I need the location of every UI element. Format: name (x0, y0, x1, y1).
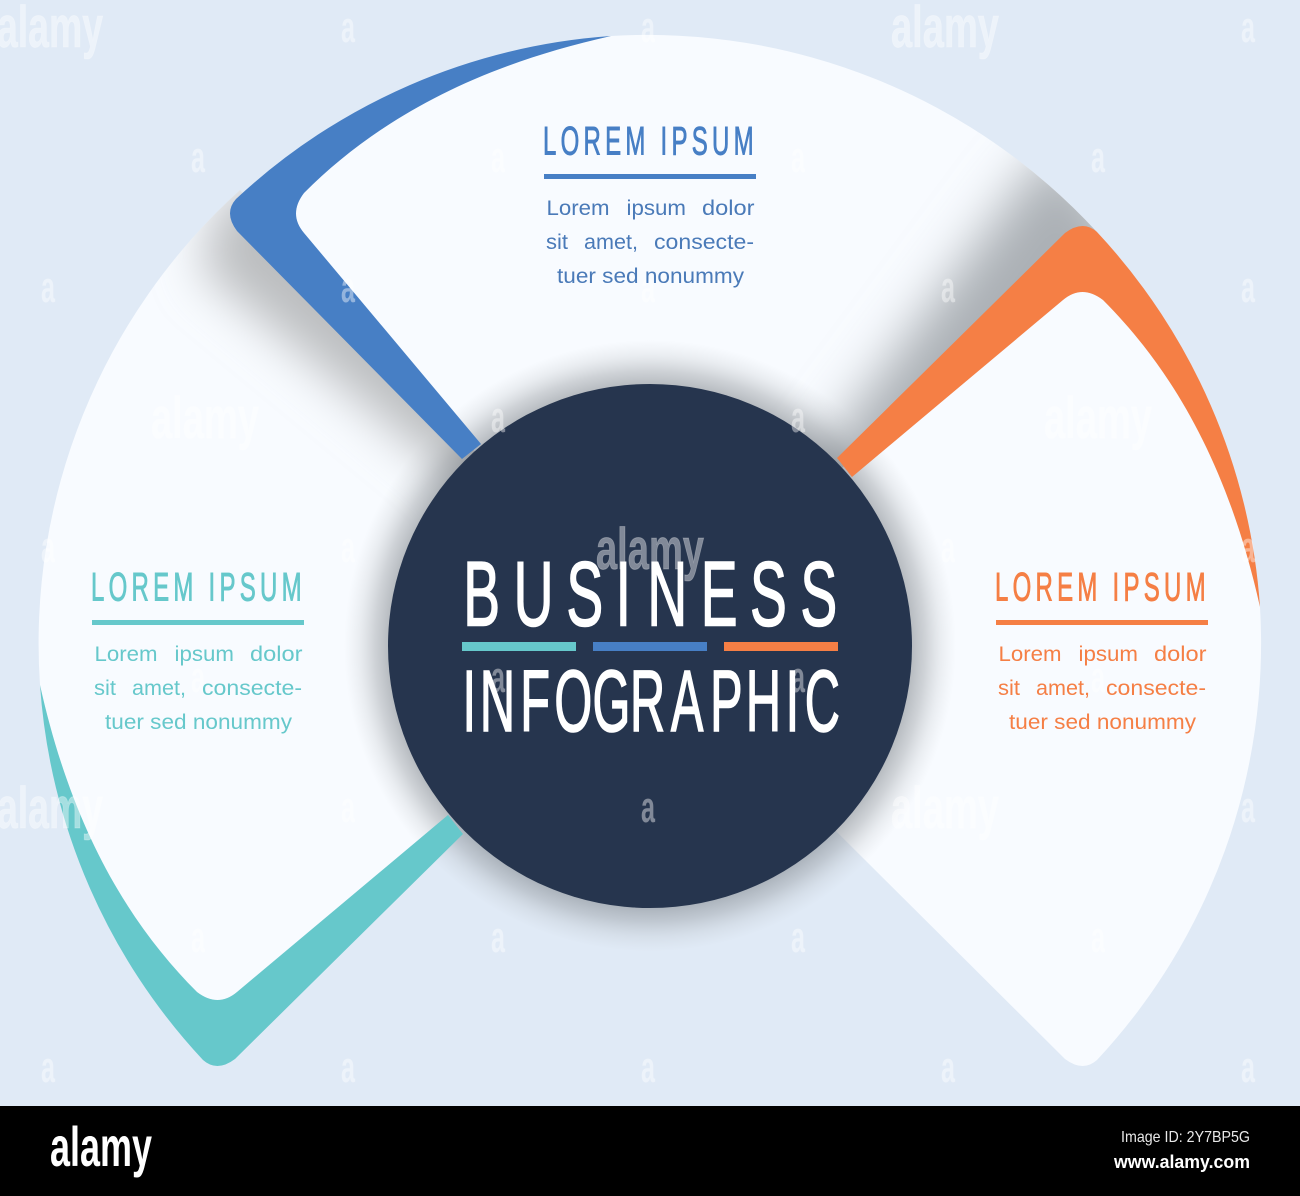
body text: Lorem (94, 643, 158, 666)
body text: sit (94, 677, 116, 700)
body text: Lorem (546, 197, 610, 220)
watermark pattern: a (1091, 653, 1105, 702)
body text: consecte- (202, 677, 302, 700)
panel: left segment (38, 190, 475, 1000)
shadow cast by the top segment (183, 190, 475, 488)
body text: ipsum (1078, 643, 1138, 666)
watermark pattern: a (341, 783, 355, 832)
body text: tuer sed nonummy (105, 711, 293, 734)
underline (544, 174, 756, 179)
title: business infographic (462, 543, 840, 750)
body text: amet, (584, 231, 638, 254)
watermark pattern: a (641, 3, 655, 52)
watermark pattern: alamy (596, 517, 704, 582)
watermark pattern: a (191, 653, 205, 702)
watermark pattern: a (1241, 263, 1255, 312)
watermark pattern: a (641, 1043, 655, 1092)
website: www.alamy.com (1113, 1152, 1250, 1172)
shadow cast by the right segment (808, 154, 1097, 468)
body text (546, 197, 754, 288)
body text: ipsum (626, 197, 686, 220)
body text: dolor (702, 197, 754, 220)
watermark pattern: a (491, 393, 505, 442)
watermark pattern: a (341, 3, 355, 52)
body text: tuer sed nonummy (557, 265, 745, 288)
body text: dolor (1154, 643, 1206, 666)
body text: sit (998, 677, 1020, 700)
panel: right segment (650, 292, 1261, 1066)
watermark pattern: a (1091, 133, 1105, 182)
watermark pattern: a (491, 133, 505, 182)
accent: orange crescent (837, 226, 1260, 607)
watermark pattern: a (641, 263, 655, 312)
body text (998, 643, 1206, 734)
watermark pattern: alamy (151, 386, 259, 451)
body text: ipsum (174, 643, 234, 666)
title line: INFOGRAPHIC: INFOGRAPHIC (463, 652, 840, 750)
text block: right segment (995, 564, 1208, 734)
accent: teal crescent (40, 685, 463, 1066)
watermark pattern: a (1241, 783, 1255, 832)
centre circle (388, 384, 912, 908)
watermark pattern: a (791, 653, 805, 702)
body text: tuer sed nonummy (1009, 711, 1197, 734)
body text: sit (546, 231, 568, 254)
underline (996, 620, 1208, 625)
panel: top segment (296, 35, 1097, 468)
watermark pattern: a (341, 1043, 355, 1092)
watermark pattern: a (491, 653, 505, 702)
body text: amet, (1036, 677, 1090, 700)
watermark pattern: a (191, 913, 205, 962)
watermark pattern: alamy (0, 776, 103, 841)
tri-colour divider (462, 642, 838, 651)
text block: left segment (91, 564, 304, 734)
title line: BUSINESS: BUSINESS (463, 543, 837, 646)
watermark pattern: a (41, 263, 55, 312)
watermark pattern: a (1241, 3, 1255, 52)
watermark pattern: a (491, 913, 505, 962)
watermark pattern: a (1091, 913, 1105, 962)
watermark pattern: a (791, 913, 805, 962)
watermark pattern: a (341, 523, 355, 572)
watermark pattern: a (941, 263, 955, 312)
body text: Lorem (998, 643, 1062, 666)
footer bar (0, 1106, 1300, 1196)
heading: LOREM IPSUM (995, 564, 1206, 609)
watermark pattern: a (641, 783, 655, 832)
body text: amet, (132, 677, 186, 700)
watermark pattern: a (341, 263, 355, 312)
watermark pattern: a (941, 523, 955, 572)
watermark pattern: a (1241, 1043, 1255, 1092)
heading: LOREM IPSUM (543, 118, 754, 163)
watermark pattern: a (791, 133, 805, 182)
watermark pattern: alamy (891, 776, 999, 841)
text block: top segment (543, 118, 756, 288)
body text: dolor (250, 643, 302, 666)
body text: consecte- (654, 231, 754, 254)
watermark pattern: a (41, 1043, 55, 1092)
image id: Image ID: 2Y7BP5G (1121, 1129, 1250, 1146)
watermark pattern: a (191, 133, 205, 182)
body text (94, 643, 302, 734)
heading: LOREM IPSUM (91, 564, 302, 609)
watermark pattern: alamy (1044, 386, 1152, 451)
watermark pattern: a (1241, 523, 1255, 572)
watermark pattern: a (41, 523, 55, 572)
watermark pattern: a (941, 1043, 955, 1092)
underline (92, 620, 304, 625)
accent: blue crescent (230, 36, 611, 459)
watermark pattern: a (791, 393, 805, 442)
footer logo: alamy (50, 1115, 152, 1178)
body text: consecte- (1106, 677, 1206, 700)
centre circle shadow (344, 340, 956, 952)
